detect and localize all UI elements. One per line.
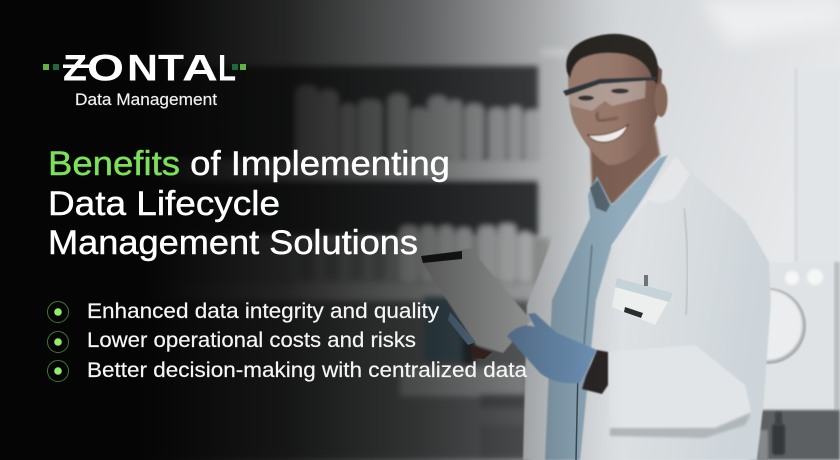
bullet item 1: Enhanced data integrity and quality [87,299,439,323]
title: Management Solutions [48,224,418,262]
benefits list [48,299,527,382]
bullet item 2: Lower operational costs and risks [87,328,416,352]
blue shirt [545,155,668,460]
title: Benefits of Implementing [48,145,450,183]
logo wordmark: A [182,48,218,88]
lab coat [523,156,771,460]
blue glove [507,313,597,383]
logo wordmark [63,48,236,88]
far hand [470,345,492,359]
coat collar [596,156,690,290]
logo wordmark: Z [63,48,87,88]
logo pixel squares [43,64,246,70]
smile [588,125,628,142]
hair [566,34,658,84]
nose shadow [597,112,618,121]
bullet item 3: Better decision-making with centralized data [87,358,527,382]
ear [654,83,668,117]
safety glasses [563,77,657,111]
logo wordmark: L [218,48,236,88]
head [568,48,662,165]
bottles upper shelf [296,86,540,162]
logo tagline: Data Management [75,91,217,109]
wrist watch [582,350,608,394]
sleeve across body [608,345,752,430]
person: scientist in lab coat [420,34,771,460]
tablet clip [421,251,462,263]
neck [590,125,660,205]
logo wordmark: T [158,48,184,88]
washer unit [730,262,840,460]
name badge [612,275,673,325]
title [48,145,450,262]
sleeve seam [684,208,688,315]
tablet [420,248,531,353]
logo wordmark: N [127,48,158,88]
logo: ZONTAL Data Management [43,48,246,109]
title: Data Lifecycle [48,185,280,223]
dark inner collar [590,180,610,212]
bottles lower shelf [400,224,532,282]
logo wordmark: O [87,48,124,88]
